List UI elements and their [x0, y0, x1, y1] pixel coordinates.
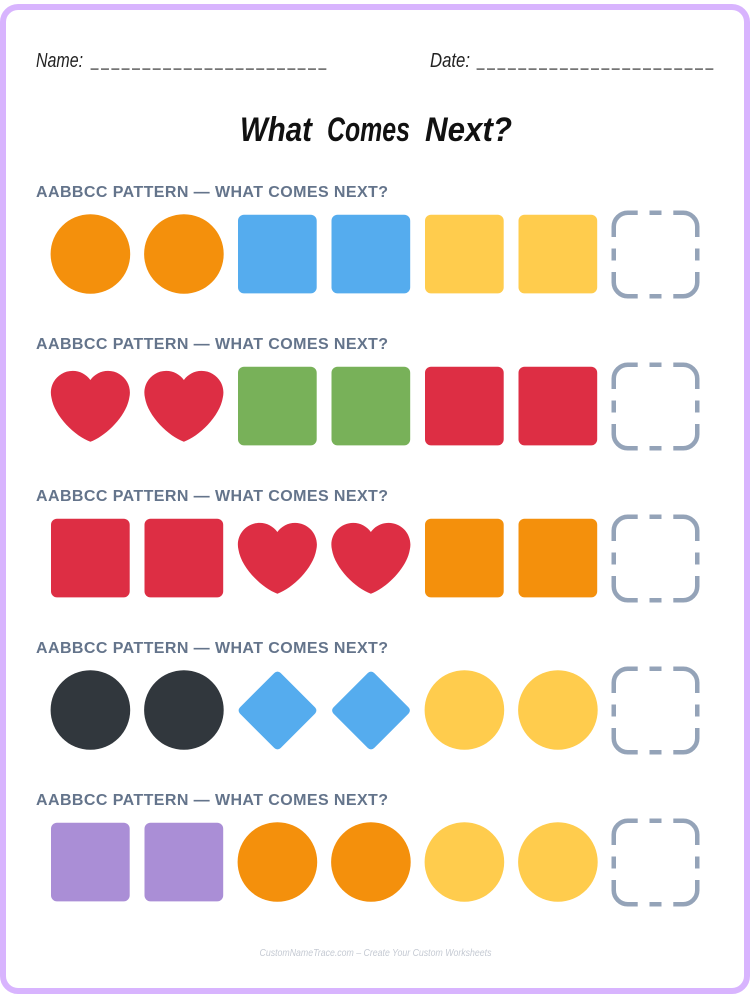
row 3 answer box: [614, 517, 697, 600]
row 4 heading: AABBCC PATTERN — WHAT COMES NEXT?: [36, 640, 388, 657]
title: What: [240, 111, 313, 149]
title: Next?: [425, 111, 512, 149]
row 2 answer box: [614, 365, 697, 448]
name write-in line: _______________________: [90, 55, 327, 70]
row 1 answer box: [614, 213, 697, 296]
panel: row 2: [36, 336, 697, 448]
row 4 shapes: black circles, blue diamonds, yellow circles: [51, 670, 598, 751]
row 5 heading: AABBCC PATTERN — WHAT COMES NEXT?: [36, 792, 388, 809]
panel: row 1: [36, 184, 697, 296]
footer: CustomNameTrace.com – Create Your Custom Worksheets: [260, 947, 492, 959]
date field: Date:: [430, 50, 470, 72]
row 3 heading: AABBCC PATTERN — WHAT COMES NEXT?: [36, 488, 388, 505]
panel: row 3: [36, 488, 697, 600]
row 1 heading: AABBCC PATTERN — WHAT COMES NEXT?: [36, 184, 388, 201]
row 2 heading: AABBCC PATTERN — WHAT COMES NEXT?: [36, 336, 388, 353]
row 1 shapes: orange circles, blue squares, yellow squares: [51, 214, 597, 294]
row 2 shapes: red hearts, green squares, red squares: [51, 367, 597, 445]
panel: row 4: [36, 640, 697, 752]
panel: row 5: [36, 792, 697, 904]
name field: Name:: [36, 50, 83, 72]
row 5 shapes: purple squares, orange circles, yellow circles: [51, 822, 598, 902]
row 4 answer box: [614, 669, 697, 752]
row 5 answer box: [614, 821, 697, 904]
title: Comes: [327, 111, 410, 149]
title: [240, 111, 512, 149]
row 3 shapes: red squares, red hearts, orange squares: [51, 519, 597, 597]
date write-in line: _______________________: [476, 55, 714, 70]
